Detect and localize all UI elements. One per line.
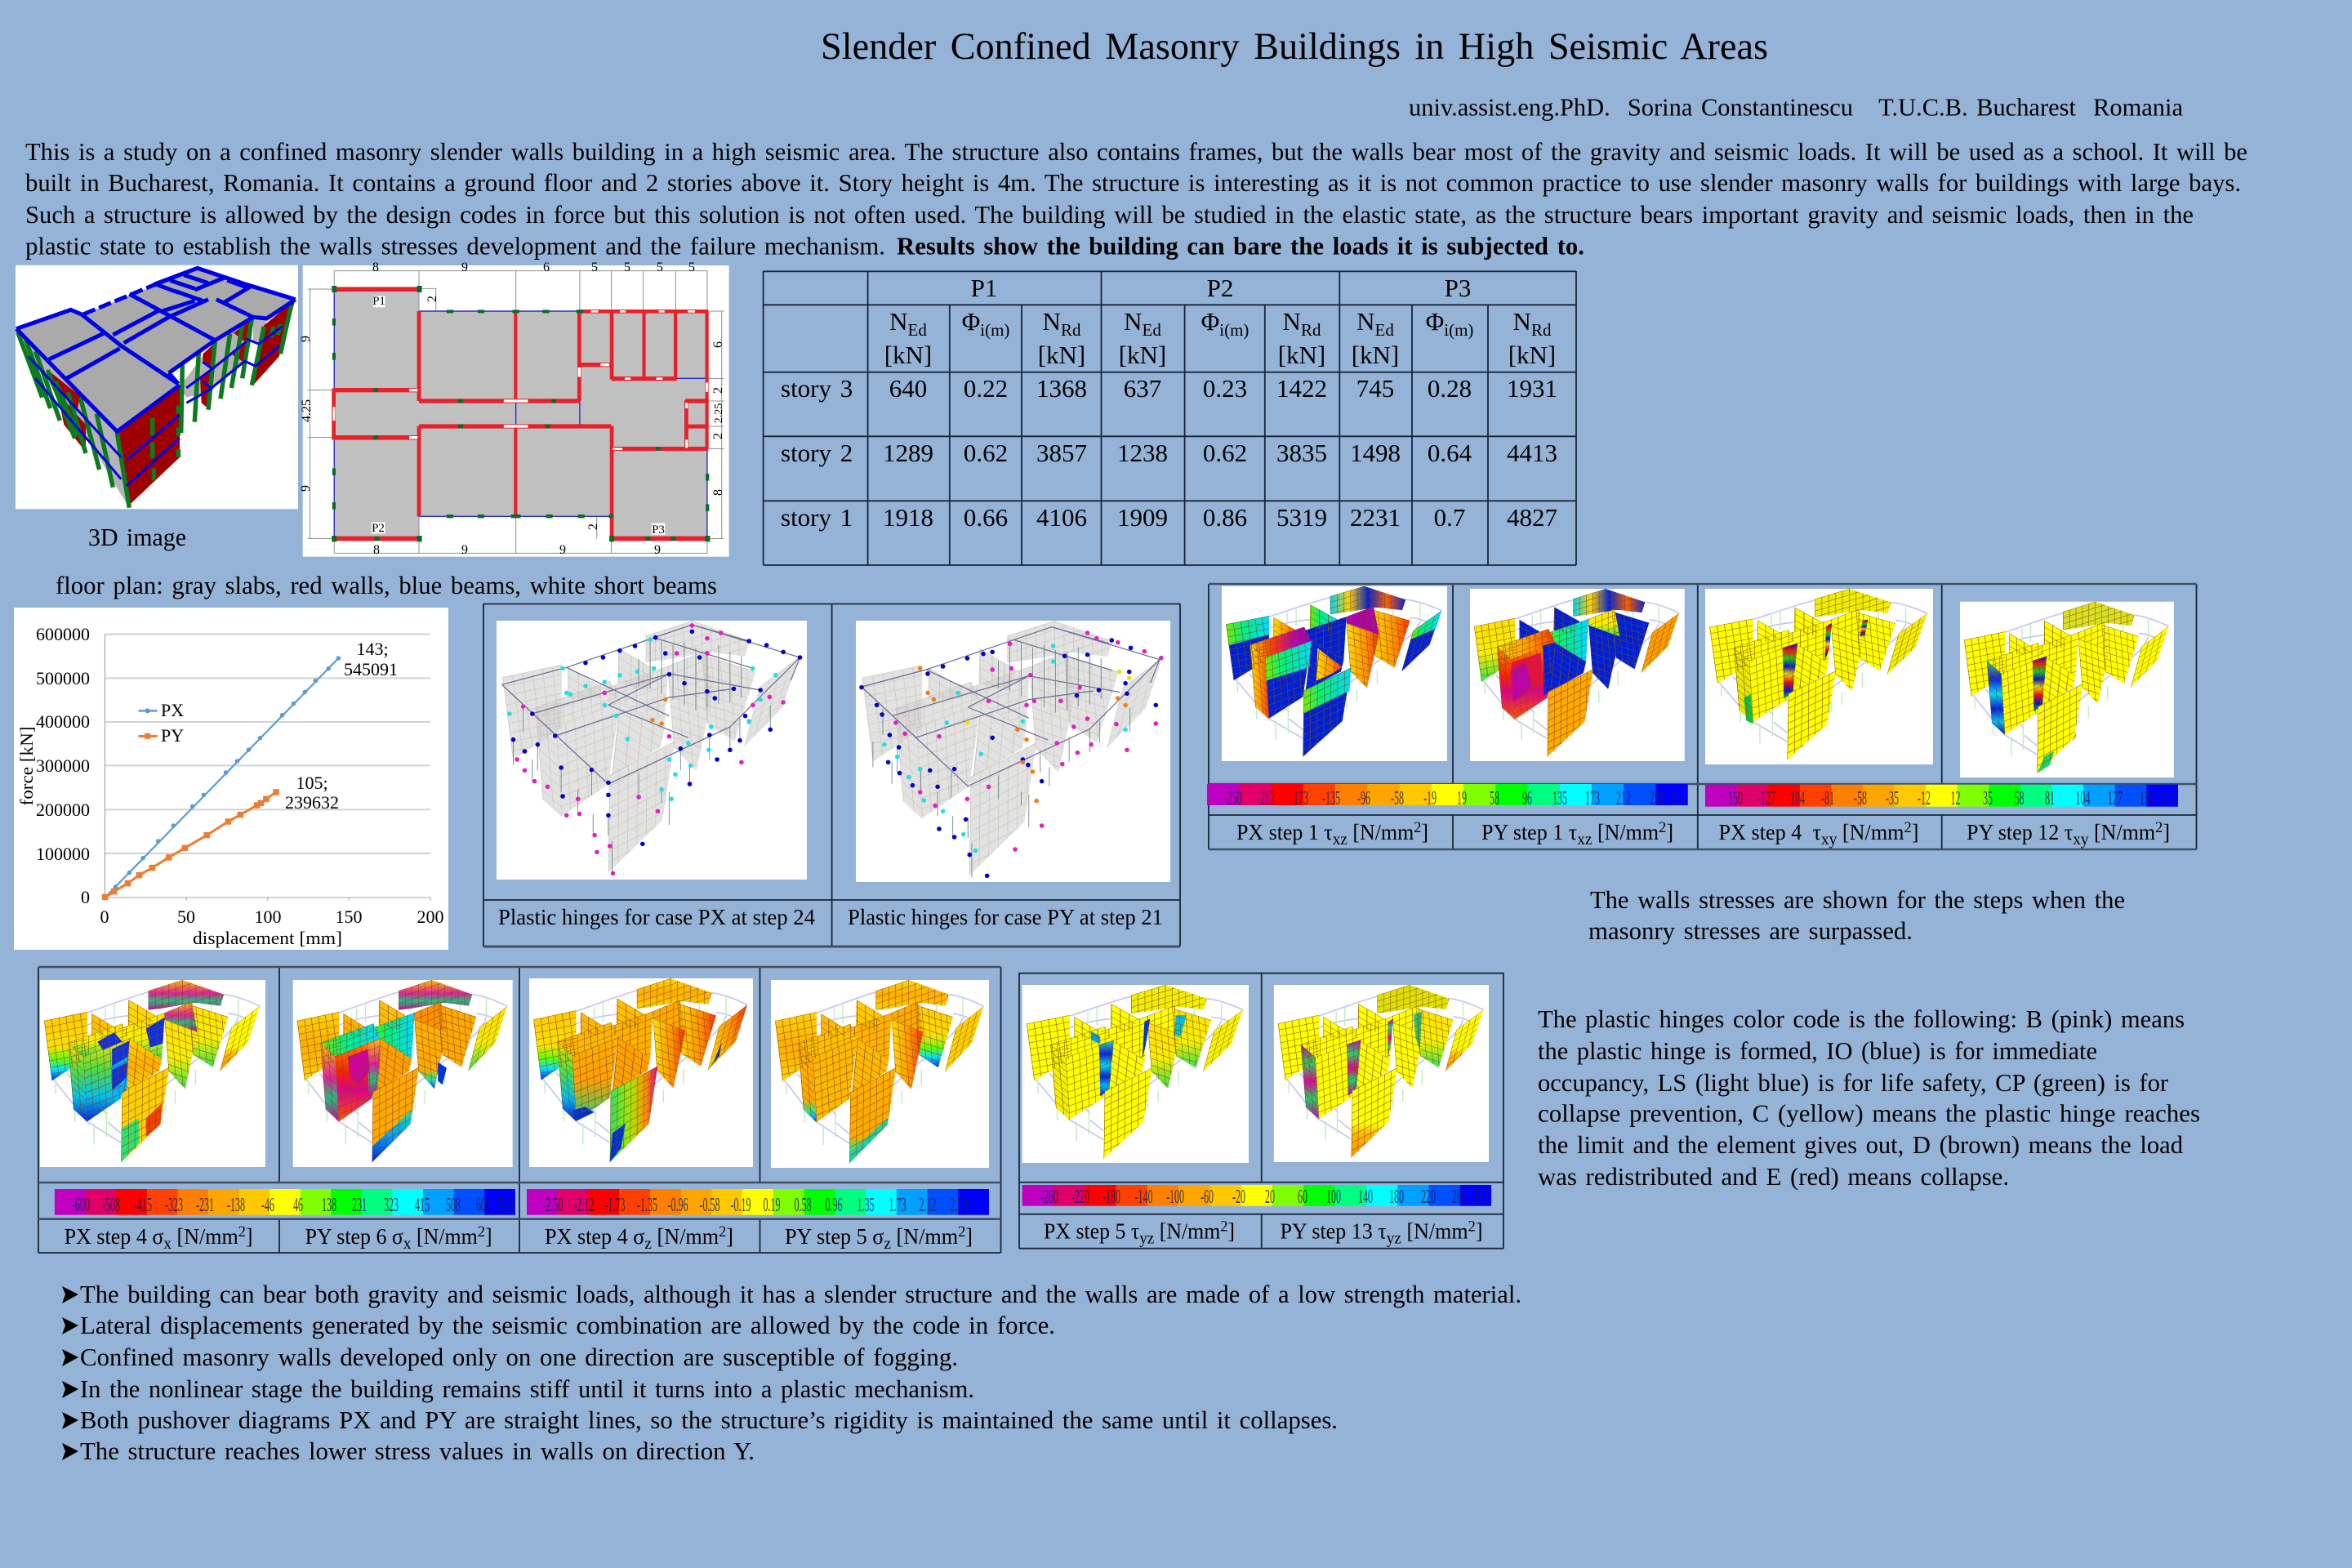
chart: pushover curves: 200 — [416, 906, 444, 927]
colorbar: txy: 150 — [2140, 788, 2154, 809]
caption: PY step 6 sx: [N/mm — [411, 1224, 478, 1249]
colorbar: sx: -323 — [165, 1195, 183, 1216]
caption: PY step 6 sx: 2 — [478, 1223, 485, 1241]
colorbar: txy: -150 — [1725, 788, 1743, 809]
caption: PX step 4 sx: [N/mm — [172, 1224, 238, 1249]
colorbar: txz: -212 — [1257, 788, 1275, 809]
chart: pushover curves: 50 — [177, 906, 195, 927]
table: wall forces: 1238 — [1117, 439, 1168, 467]
caption: PY step 6 sx: x — [403, 1235, 411, 1253]
colorbar: sx: 138 — [322, 1195, 336, 1216]
plot: hinges PY step 21 — [862, 621, 1162, 877]
colorbar: tyz: -180 — [1102, 1187, 1120, 1208]
chart: pushover curves: force [kN] — [16, 727, 37, 805]
table: wall forces: [kN] — [1119, 341, 1166, 369]
colorbar: sx: 601 — [476, 1195, 491, 1216]
floor plan dimensions and wall labels: 6 — [543, 261, 550, 274]
floor plan dimensions and wall labels: 5 — [591, 261, 598, 274]
table: wall forces: [kN] — [884, 341, 932, 369]
floor plan dimensions and wall labels: 5 — [657, 261, 663, 274]
plot: PX step 5 tyz — [1022, 985, 1249, 1163]
chart: pushover curves — [14, 608, 448, 950]
chart: pushover curves: 105; — [296, 773, 328, 793]
chart: pushover curves: 600000 — [36, 624, 90, 644]
table: wall forces: N — [889, 307, 908, 336]
colorbar: txz: 173 — [1585, 788, 1600, 809]
table: wall forces: Φ — [1201, 307, 1219, 336]
table: wall forces: [kN] — [1508, 341, 1556, 369]
series PY — [105, 792, 276, 898]
colorbar: txy: 35 — [1983, 788, 1993, 809]
plot: PX step 4 txy — [1705, 589, 1933, 764]
chart: pushover curves: 500000 — [36, 668, 90, 688]
caption: PX step 1 txz: 2 — [1414, 819, 1421, 836]
colorbar: sx: 508 — [446, 1195, 461, 1216]
chart: pushover curves: 0 — [81, 887, 90, 907]
caption: PY step 13 tyz: [N/mm — [1401, 1219, 1468, 1244]
caption: PX step 4 sx: ] — [246, 1224, 253, 1249]
chart: pushover curves: 400000 — [36, 711, 90, 732]
colorbar: sz: -0.58 — [700, 1195, 719, 1216]
colorbar: sz: 2.12 — [920, 1195, 936, 1216]
floor plan dimensions and wall labels: 8 — [711, 489, 725, 496]
caption: PX step 1 txz: [N/mm — [1348, 820, 1414, 844]
image: 3D building model — [16, 265, 298, 509]
intro paragraph: Such a structure is allowed by the design codes in force but this solution is not often used. The building will be studied in the elastic state, as the structure bears important gravity and seismic loads, then in the — [25, 200, 2194, 229]
chart: pushover curves: 300000 — [36, 755, 90, 776]
caption: PY step 13 tyz: ] — [1476, 1219, 1483, 1244]
caption: PX step 4 sx: 2 — [238, 1223, 246, 1241]
caption: 3D image: 3D image — [88, 523, 186, 551]
caption: PX step 1 txz: PX step 1 τ — [1236, 820, 1337, 844]
colorbar: sx: -508 — [102, 1195, 120, 1216]
table: wall forces: 1498 — [1350, 439, 1401, 467]
plot: PY step 12 txy — [1960, 602, 2174, 777]
series PX — [105, 658, 338, 898]
table: wall forces: P1 — [971, 274, 997, 302]
table: wall forces: 0.23 — [1203, 374, 1247, 403]
colorbar: sz: -1.73 — [605, 1195, 625, 1216]
caption: PX step 4 sx: x — [163, 1235, 172, 1253]
table: wall forces: [kN] — [1278, 341, 1325, 369]
table: wall forces: 745 — [1356, 374, 1394, 403]
conclusions list: The building can bear both gravity and seismic loads, although it has a slender structure and the walls are made of a low strength material. — [80, 1280, 1521, 1308]
chart: pushover curves: 239632 — [285, 792, 339, 813]
text: plastic hinges colour code: occupancy, LS (light blue) is for life safety, CP (green) is for — [1538, 1068, 2169, 1097]
caption: PX step 4 sz: PX step 4 σ — [545, 1224, 648, 1249]
caption: PX step 4 txy: 2 — [1904, 819, 1912, 836]
colorbar: sz: 0.58 — [795, 1195, 811, 1216]
table: wall forces: 1931 — [1507, 374, 1557, 403]
table: wall forces: N — [1356, 307, 1375, 336]
table: wall forces: 0.62 — [1203, 439, 1247, 467]
table: wall forces — [764, 271, 1576, 565]
colorbar: txy: 127 — [2108, 788, 2123, 809]
chart: pushover curves: 100 — [255, 906, 281, 927]
colorbar: tyz: -260 — [1040, 1187, 1058, 1208]
colorbar: txz: -250 — [1224, 788, 1242, 809]
table: wall forces: N — [1283, 307, 1301, 336]
conclusions list: Lateral displacements generated by the seismic combination are allowed by the code in force. — [80, 1311, 1055, 1339]
colorbar: sz — [527, 1189, 989, 1216]
text: wall stresses note: The walls stresses are shown for the steps when the — [1590, 885, 2125, 914]
table: wall forces: story 1 — [781, 503, 853, 532]
colorbar: sx — [55, 1189, 515, 1216]
colorbar: txy — [1705, 785, 2178, 809]
floor plan dimensions and wall labels: 2.25 — [713, 403, 725, 423]
colorbar: sx: E-3 — [499, 1195, 514, 1216]
colorbar: sz: 1.73 — [889, 1195, 906, 1216]
table: wall forces: 1422 — [1276, 374, 1327, 403]
caption: PX step 4 txy: PX step 4 τ — [1718, 820, 1824, 844]
colorbar: tyz — [1022, 1185, 1491, 1208]
colorbar: tyz: 100 — [1326, 1187, 1341, 1208]
colorbar: sx: -415 — [134, 1195, 152, 1216]
colorbar: tyz: -140 — [1135, 1187, 1152, 1208]
colorbar: sz: -0.19 — [731, 1195, 751, 1216]
floor plan dimensions and wall labels: 6 — [711, 341, 725, 348]
chart: pushover curves: PY — [161, 725, 184, 746]
floor plan dimensions and wall labels: 9 — [299, 485, 313, 492]
table: wall forces: Ed — [1143, 320, 1161, 340]
colorbar: txy: -81 — [1821, 788, 1834, 809]
table: wall forces: story 3 — [781, 374, 853, 403]
caption: PX step 4 txy: [N/mm — [1837, 820, 1904, 844]
caption: PY step 5 sz: 2 — [958, 1223, 965, 1241]
caption: PY step 5 sz: [N/mm — [891, 1224, 958, 1249]
chart: pushover curves: 143; — [356, 639, 389, 659]
table: wall forces: [kN] — [1352, 341, 1399, 369]
table: wall forces: 1368 — [1036, 374, 1087, 403]
table: wall forces: 0.7 — [1434, 503, 1465, 532]
chart: pushover curves: 100000 — [36, 844, 90, 864]
table: wall forces: N — [1043, 307, 1061, 336]
plot: PX step 4 sx — [40, 980, 265, 1167]
conclusions list: Both pushover diagrams PX and PY are straight lines, so the structure’s rigidity is maintained the same until it collapses. — [80, 1405, 1338, 1434]
colorbar: sx: 46 — [293, 1195, 303, 1216]
panel: normal stresses sigma x, sigma z — [38, 967, 1001, 1253]
plot: hinges PX step 24 — [502, 621, 800, 875]
table: wall forces: i(m) — [980, 320, 1009, 340]
floor plan dimensions and wall labels: P3 — [652, 523, 665, 537]
table: wall forces: 1909 — [1117, 503, 1168, 532]
title: Slender Confined Masonry Buildings in High Seismic Areas — [821, 25, 1768, 68]
colorbar: txz: E-3 — [1671, 788, 1686, 809]
caption: PX step 5 tyz: ] — [1227, 1219, 1235, 1244]
table: wall forces: 0.64 — [1428, 439, 1472, 467]
colorbar: sz: 1.35 — [858, 1195, 874, 1216]
table: wall forces: 0.22 — [964, 374, 1008, 403]
panel: plastic hinges — [483, 604, 1180, 947]
conclusions list: In the nonlinear stage the building remains stiff until it turns into a plastic mechanism. — [80, 1374, 974, 1403]
table: wall forces: story 2 — [781, 439, 853, 467]
colorbar: txz: -19 — [1423, 788, 1437, 809]
plot: PY step 1 txz — [1470, 589, 1685, 761]
conclusions list — [62, 1280, 1521, 1465]
table: wall forces: 0.62 — [964, 439, 1008, 467]
floor plan dimensions and wall labels: 8 — [373, 543, 380, 557]
caption: PX step 5 tyz: [N/mm — [1154, 1219, 1220, 1244]
caption: PY step 13 tyz: PY step 13 τ — [1281, 1219, 1391, 1244]
caption: PX step 4 sx: PX step 4 σ — [65, 1224, 167, 1249]
table: wall forces: Ed — [908, 320, 927, 340]
caption: PX step 1 txz: ] — [1421, 820, 1428, 844]
colorbar: txz: 135 — [1552, 788, 1567, 809]
colorbar: txz: -58 — [1391, 788, 1404, 809]
caption: PY step 13 tyz: yz — [1387, 1230, 1401, 1248]
caption: PY step 12 txy: [N/mm — [2088, 820, 2155, 844]
colorbar: txy: E-3 — [2161, 788, 2176, 809]
text: plastic hinges colour code — [1538, 1004, 2200, 1191]
colorbar: sz: 0.96 — [826, 1195, 842, 1216]
table: wall forces: 0.66 — [964, 503, 1008, 532]
colorbar: txz: -173 — [1290, 788, 1308, 809]
colorbar: txy: -127 — [1757, 788, 1775, 809]
colorbar: txy: 12 — [1951, 788, 1960, 809]
colorbar: txz: 19 — [1457, 788, 1467, 809]
table: wall forces: P2 — [1207, 274, 1233, 302]
chart: pushover curves: 545091 — [344, 659, 398, 679]
colorbar: txy: 58 — [2015, 788, 2024, 809]
colorbar: txz: 58 — [1490, 788, 1499, 809]
colorbar: sx: -231 — [196, 1195, 214, 1216]
table: wall forces: 1918 — [883, 503, 933, 532]
intro paragraph: built in Bucharest, Romania. It contains a ground floor and 2 stories above it. Story height is 4m. The structure is interesting as it is not common practice to use slender masonry walls for buildings with large bays. — [25, 168, 2241, 197]
colorbar: tyz: 20 — [1265, 1187, 1275, 1208]
caption: PY step 12 txy: 2 — [2155, 819, 2163, 836]
floor plan dimensions and wall labels: P2 — [372, 522, 385, 535]
caption: PX step 4 sz: ] — [726, 1224, 733, 1249]
colorbar: tyz: -20 — [1232, 1187, 1245, 1208]
intro paragraph: This is a study on a confined masonry slender walls building in a high seismic area. The structure also contains frames, but the walls bear most of the gravity and seismic loads. It will be used as a school. It will be — [25, 137, 2247, 166]
table: wall forces: 0.28 — [1428, 374, 1472, 403]
caption: PY step 5 sz: ] — [965, 1224, 973, 1249]
table: wall forces: Rd — [1061, 320, 1081, 340]
table: wall forces: 3857 — [1036, 439, 1087, 467]
text: plastic hinges colour code: the limit and the element gives out, D (brown) means the load — [1538, 1130, 2183, 1159]
caption: PY step 5 sz: z — [884, 1235, 891, 1253]
table: wall forces: 4106 — [1036, 503, 1087, 532]
colorbar: tyz: 220 — [1421, 1187, 1436, 1208]
chart: pushover curves: 150 — [335, 906, 363, 927]
conclusions list: The structure reaches lower stress values in walls on direction Y. — [80, 1437, 755, 1465]
colorbar: txz: -96 — [1357, 788, 1370, 809]
colorbar: txy: 104 — [2076, 788, 2091, 809]
colorbar: tyz: 60 — [1298, 1187, 1307, 1208]
colorbar: sz: 0.19 — [764, 1195, 780, 1216]
caption: PY step 1 txz: 2 — [1659, 819, 1666, 836]
caption: PX step 5 tyz: yz — [1139, 1230, 1154, 1248]
table: wall forces: Ed — [1375, 320, 1394, 340]
plot: PX step 4 sz — [529, 978, 753, 1167]
colorbar: sx: -46 — [261, 1195, 274, 1216]
floor plan dimensions and wall labels: 2 — [586, 523, 600, 530]
colorbar: sx: -600 — [72, 1195, 90, 1216]
table: wall forces: 640 — [889, 374, 927, 403]
floor plan dimensions and wall labels: 9 — [654, 543, 661, 557]
table: wall forces: 2231 — [1350, 503, 1401, 532]
colorbar: tyz: -60 — [1200, 1187, 1214, 1208]
colorbar: sz: -0.96 — [668, 1195, 688, 1216]
caption: PX step 4 txy: ] — [1912, 820, 1919, 844]
table: wall forces: N — [1124, 307, 1143, 336]
caption: PX step 5 tyz: 2 — [1220, 1218, 1227, 1236]
floor plan dimensions and wall labels: 2 — [425, 296, 439, 302]
floor plan dimensions and wall labels: 2 — [711, 433, 725, 439]
colorbar: tyz: 180 — [1389, 1187, 1404, 1208]
caption: PX step 4 sz: z — [644, 1235, 652, 1253]
text: plastic hinges colour code: was redistributed and E (red) means collapse. — [1538, 1162, 2009, 1191]
caption: PY step 1 txz: [N/mm — [1592, 820, 1659, 844]
colorbar: txz: 212 — [1616, 788, 1631, 809]
panel: plastic hinges: Plastic hinges for case PX at step 24 — [498, 905, 815, 929]
floor plan dimensions and wall labels: 9 — [559, 543, 566, 557]
colorbar: txy: -12 — [1918, 788, 1931, 809]
table: wall forces: Φ — [1426, 307, 1444, 336]
caption: PY step 1 txz: xz — [1577, 831, 1592, 849]
caption: PY step 6 sx: PY step 6 σ — [305, 1224, 408, 1249]
text: plastic hinges colour code: collapse prevention, C (yellow) means the plastic hinge reaches — [1538, 1099, 2200, 1127]
table: wall forces: Φ — [962, 307, 980, 336]
colorbar: txy: -35 — [1886, 788, 1899, 809]
plot: PY step 13 tyz — [1274, 985, 1489, 1162]
caption: PY step 12 txy: xy — [2073, 831, 2088, 849]
plot: PY step 5 sz — [771, 980, 989, 1168]
table: wall forces: P3 — [1445, 274, 1471, 302]
floor plan dimensions and wall labels: 2 — [711, 387, 725, 394]
caption: PY step 1 txz: PY step 1 τ — [1481, 820, 1581, 844]
colorbar: sx: 415 — [415, 1195, 430, 1216]
colorbar: tyz: E-3 — [1474, 1187, 1489, 1208]
colorbar: txz: -135 — [1322, 788, 1340, 809]
floor plan dimensions and wall labels: 9 — [461, 261, 468, 274]
intro paragraph — [25, 137, 2247, 260]
caption: floor plan: floor plan: gray slabs, red walls, blue beams, white short beams — [56, 571, 717, 599]
table: wall forces: i(m) — [1219, 320, 1249, 340]
chart: pushover curves: displacement [mm] — [193, 928, 342, 948]
table: wall forces: 3835 — [1276, 439, 1327, 467]
caption: PX step 1 txz: xz — [1333, 831, 1348, 849]
table: wall forces: Rd — [1531, 320, 1552, 340]
colorbar: txz: 250 — [1650, 788, 1664, 809]
colorbar: txz: 96 — [1522, 788, 1532, 809]
colorbar: sz: -2.50 — [543, 1195, 563, 1216]
author line: univ.assist.eng.PhD. Sorina Constantinescu T.U.C.B. Bucharest Romania — [1409, 93, 2183, 121]
chart: pushover curves: 0 — [100, 906, 109, 927]
table: wall forces: 4413 — [1507, 439, 1557, 467]
caption: PY step 6 sx: ] — [485, 1224, 492, 1249]
panel: plastic hinges: Plastic hinges for case PY at step 21 — [848, 905, 1163, 929]
caption: PY step 12 txy: ] — [2163, 820, 2170, 844]
table: wall forces: 637 — [1124, 374, 1161, 403]
panel: shear stresses tau yz — [1019, 973, 1503, 1249]
colorbar: sz: -2.12 — [574, 1195, 594, 1216]
colorbar: txy: -104 — [1787, 788, 1805, 809]
colorbar: tyz: 260 — [1452, 1187, 1467, 1208]
text: wall stresses note: masonry stresses are surpassed. — [1588, 916, 1913, 945]
colorbar: tyz: 140 — [1358, 1187, 1373, 1208]
caption: PY step 13 tyz: 2 — [1468, 1218, 1476, 1236]
colorbar: txy: 81 — [2045, 788, 2055, 809]
text: plastic hinges colour code: the plastic hinge is formed, IO (blue) is for immediate — [1538, 1036, 2097, 1065]
image: floor plan — [303, 265, 729, 557]
caption: PX step 4 sz: 2 — [719, 1223, 726, 1241]
chart: pushover curves: PX — [161, 700, 184, 720]
table: wall forces: 1289 — [883, 439, 933, 467]
table: wall forces: [kN] — [1038, 341, 1085, 369]
plot: PY step 6 sx — [293, 980, 513, 1167]
table: wall forces: Rd — [1301, 320, 1321, 340]
floor plan dimensions and wall labels — [299, 261, 725, 557]
floor plan dimensions and wall labels: P1 — [372, 295, 385, 308]
caption: PX step 4 txy: xy — [1821, 831, 1837, 849]
caption: PY step 5 sz: PY step 5 σ — [785, 1224, 887, 1249]
plot: PX step 1 txz — [1222, 586, 1447, 761]
colorbar: txy: -58 — [1854, 788, 1867, 809]
intro paragraph: plastic state to establish the walls stresses development and the failure mechanism. — [25, 232, 885, 260]
text: wall stresses note — [1588, 885, 2125, 945]
caption: PX step 4 sz: [N/mm — [652, 1224, 719, 1249]
caption: PY step 1 txz: ] — [1666, 820, 1673, 844]
table: wall forces: 5319 — [1276, 503, 1327, 532]
colorbar: sx: -138 — [227, 1195, 245, 1216]
colorbar: tyz: -220 — [1071, 1187, 1089, 1208]
table: wall forces: N — [1513, 307, 1531, 336]
colorbar: sz: 2.50 — [951, 1195, 967, 1216]
table: wall forces: 0.86 — [1203, 503, 1247, 532]
table: wall forces: i(m) — [1444, 320, 1473, 340]
colorbar: tyz: -100 — [1166, 1187, 1184, 1208]
floor plan dimensions and wall labels: 9 — [299, 336, 313, 342]
text: plastic hinges colour code: The plastic hinges color code is the following: B (pink) means — [1538, 1004, 2185, 1033]
colorbar: sx: 323 — [384, 1195, 399, 1216]
conclusions list: Confined masonry walls developed only on one direction are susceptible of fogging. — [80, 1343, 958, 1371]
intro paragraph: Results show the building can bare the loads it is subjected to. — [897, 232, 1584, 260]
floor plan dimensions and wall labels: 5 — [624, 261, 630, 274]
floor plan dimensions and wall labels: 5 — [688, 261, 695, 274]
floor plan dimensions and wall labels: 4.25 — [300, 399, 314, 422]
caption: PX step 5 tyz: PX step 5 τ — [1044, 1219, 1144, 1244]
panel: shear stresses tau xz, tau xy — [1207, 584, 2197, 849]
colorbar: sx: 231 — [352, 1195, 367, 1216]
caption: PY step 12 txy: PY step 12 τ — [1967, 820, 2077, 844]
chart: pushover curves: 200000 — [36, 800, 90, 820]
floor plan dimensions and wall labels: 8 — [372, 261, 379, 274]
colorbar: sz: -1.35 — [637, 1195, 657, 1216]
floor plan dimensions and wall labels: 9 — [461, 543, 468, 557]
table: wall forces: 4827 — [1507, 503, 1557, 532]
colorbar: txz — [1207, 784, 1688, 809]
